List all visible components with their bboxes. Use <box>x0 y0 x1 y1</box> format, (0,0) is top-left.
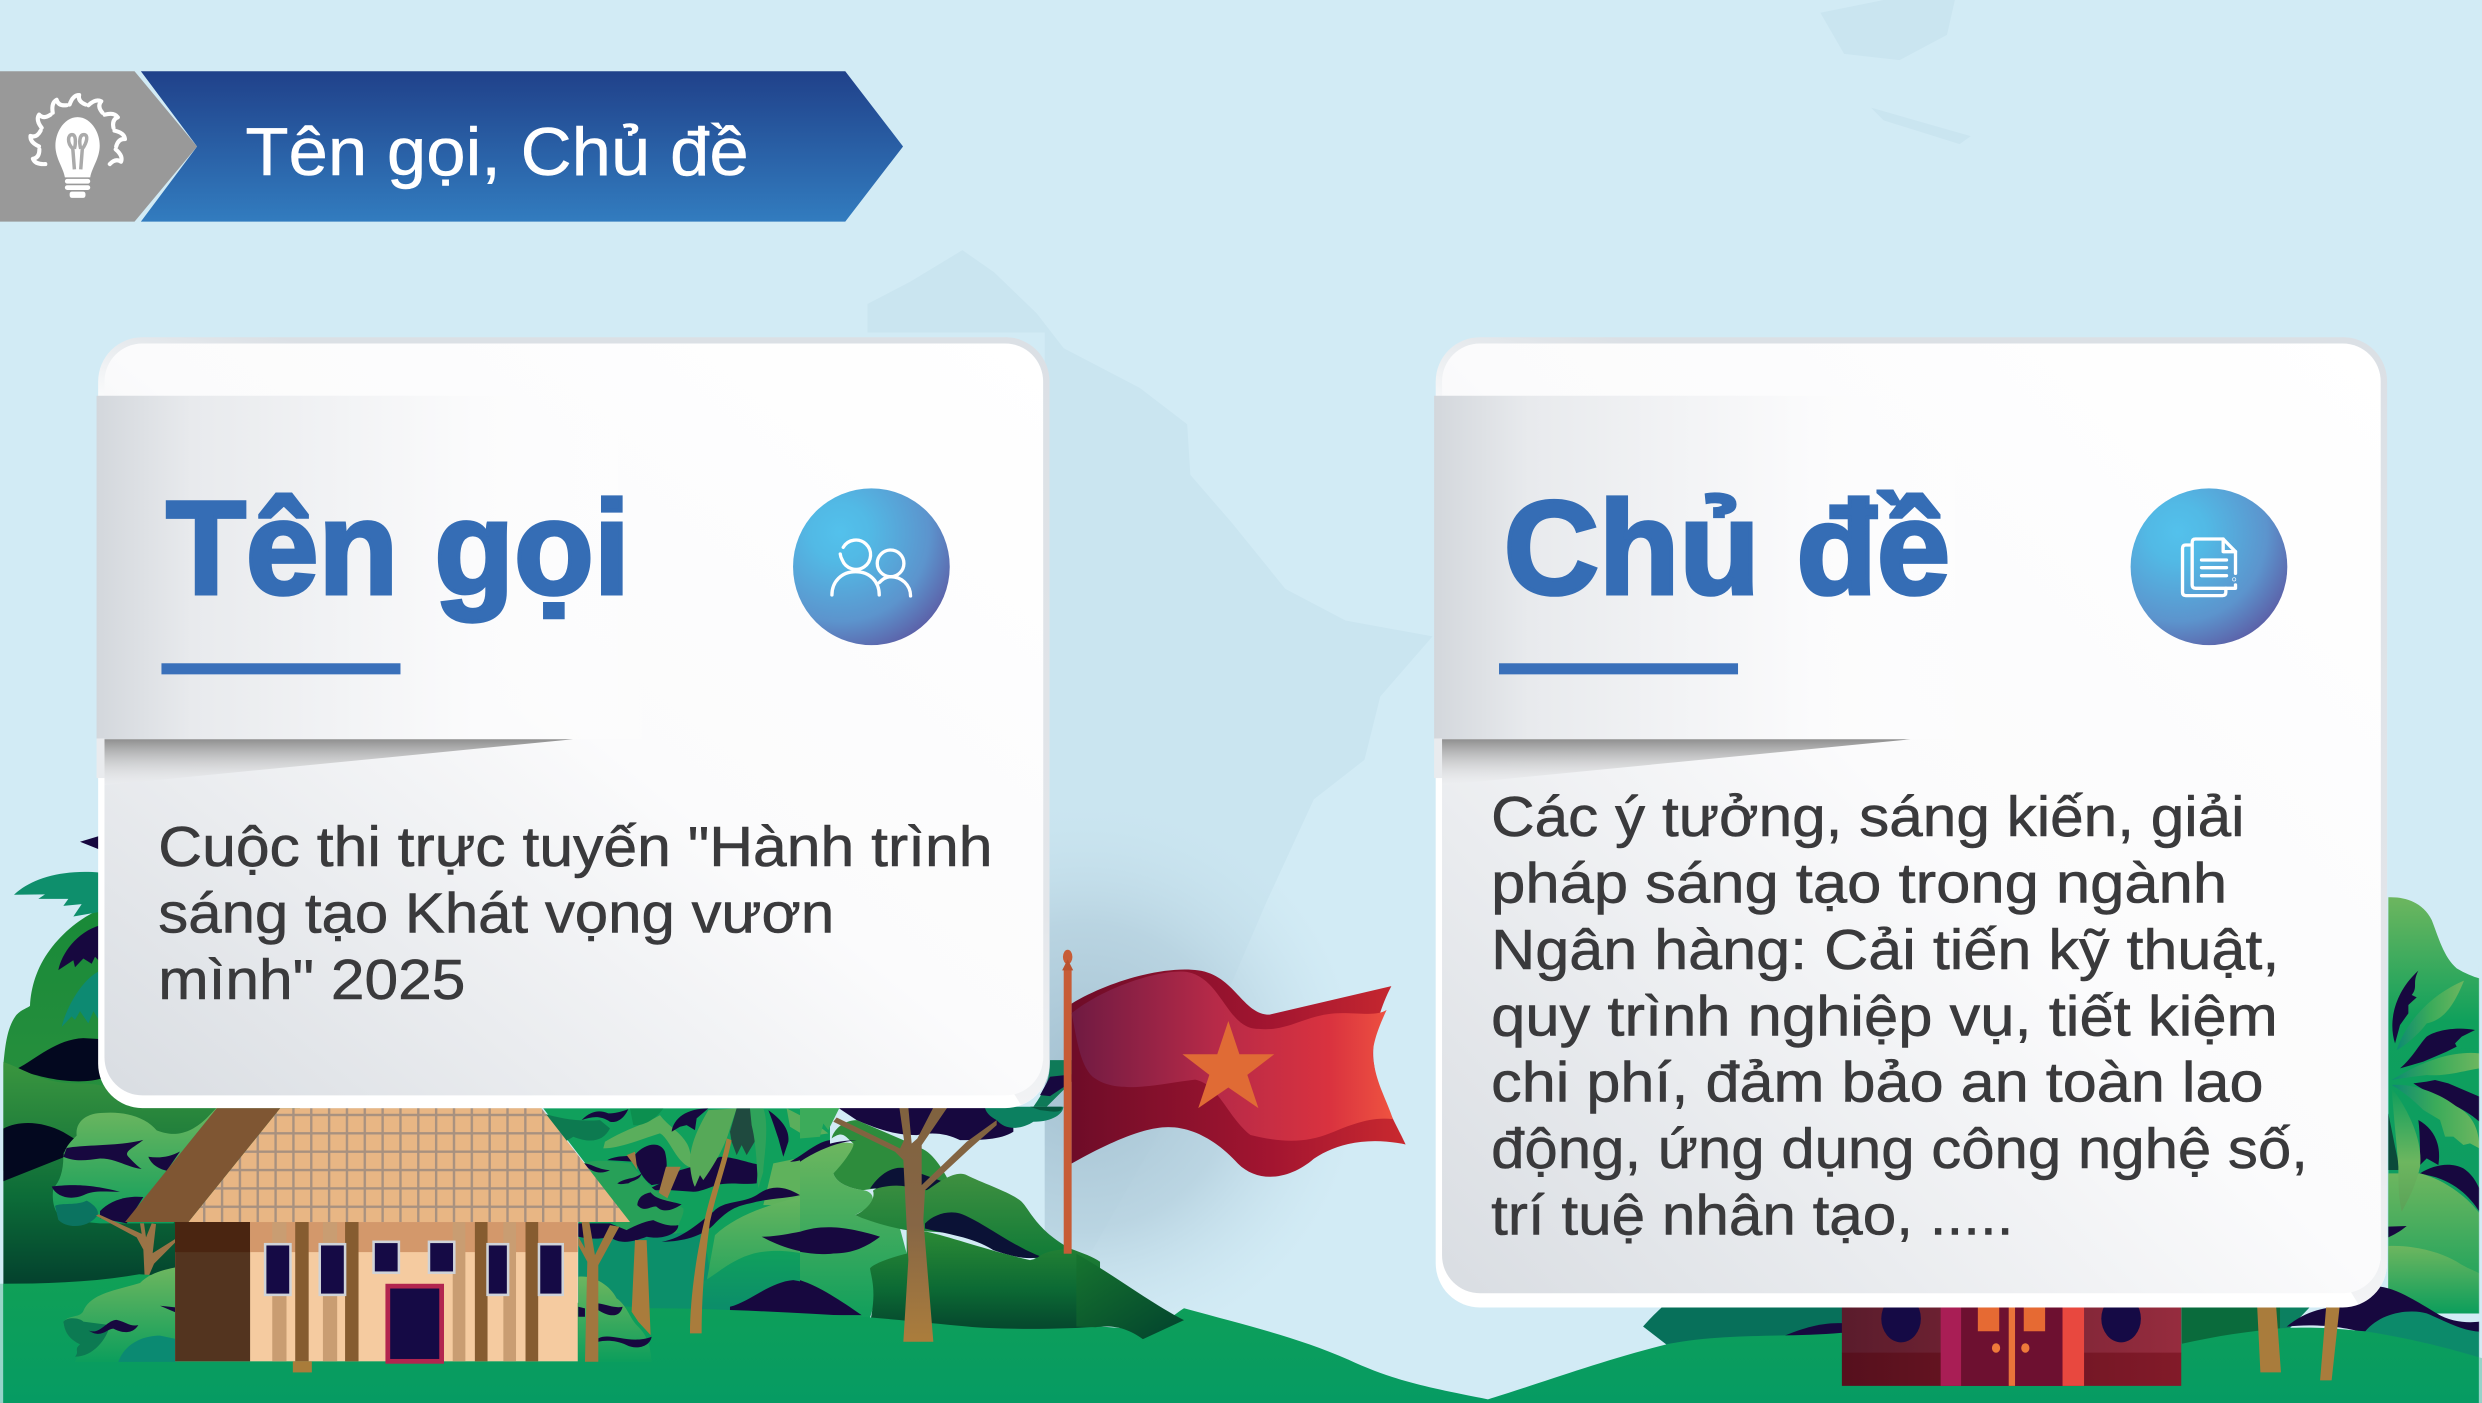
foreground trees <box>578 1107 2340 1380</box>
heading underline <box>161 663 400 674</box>
scenery: left hills <box>3 836 300 1287</box>
flag star <box>1182 1021 1274 1108</box>
windows <box>265 1242 563 1295</box>
flag pole <box>1062 950 1073 1254</box>
card body <box>1434 337 2387 1308</box>
palm fronds on the right <box>2392 971 2479 1212</box>
shrub and trunks by the house <box>578 1108 788 1362</box>
body text: Các ý tưởng, sáng kiến, giải <box>1491 785 2245 849</box>
ground <box>0 1274 2482 1403</box>
panel: Tên gọi <box>97 337 1049 1108</box>
red building on the right <box>1842 1295 2181 1386</box>
body text <box>1491 785 2308 1248</box>
scenery: right hills <box>1643 1298 2287 1353</box>
scenery: hills around big tree <box>800 1060 1100 1337</box>
body text <box>158 815 992 1012</box>
icon: people <box>793 488 950 645</box>
banner arrow <box>141 71 903 222</box>
body text: Ngân hàng: Cải tiến kỹ thuật, <box>1491 918 2279 982</box>
door <box>388 1286 442 1361</box>
body text: pháp sáng tạo trong ngành <box>1491 851 2227 915</box>
icon tab <box>0 71 197 222</box>
heading: Tên gọi <box>166 475 630 623</box>
house <box>125 1108 630 1372</box>
icon: light bulb <box>30 95 126 198</box>
banner title: Tên gọi, Chủ đề <box>245 114 749 190</box>
palm fronds center <box>690 1108 788 1188</box>
scenery: foliage right of house <box>543 1108 830 1318</box>
flag <box>1062 950 1406 1254</box>
big tree <box>833 1107 997 1342</box>
left shrub <box>63 1267 177 1362</box>
body text: quy trình nghiệp vụ, tiết kiệm <box>1491 984 2278 1048</box>
trunks on the right <box>2257 1308 2281 1372</box>
panel: Chủ đề <box>1434 337 2387 1308</box>
banner heading <box>0 71 903 222</box>
dark hill tip <box>1076 1254 1184 1339</box>
heading: Chủ đề <box>1504 475 1950 623</box>
body text: động, ứng dụng công nghệ số, <box>1491 1117 2308 1181</box>
body text: sáng tạo Khát vọng vươn <box>158 881 834 945</box>
background map of Vietnam <box>867 0 1971 1251</box>
heading underline <box>1499 663 1738 674</box>
body text: chi phí, đảm bảo an toàn lao <box>1491 1051 2264 1115</box>
card shadow on sky <box>1045 799 1361 1353</box>
flag cloth <box>1072 970 1406 1177</box>
body text: trí tuệ nhân tạo, ..... <box>1491 1184 2013 1248</box>
left tree crown <box>52 1108 217 1285</box>
body text: mình" 2025 <box>158 948 465 1012</box>
card body <box>97 337 1049 1108</box>
roof <box>125 1108 630 1222</box>
house walls <box>175 1222 578 1372</box>
body text: Cuộc thi trực tuyến "Hành trình <box>158 815 992 879</box>
scenery: right hill with palm <box>2280 897 2479 1360</box>
scene edge strips <box>0 966 2482 1403</box>
icon: document <box>2131 488 2287 645</box>
